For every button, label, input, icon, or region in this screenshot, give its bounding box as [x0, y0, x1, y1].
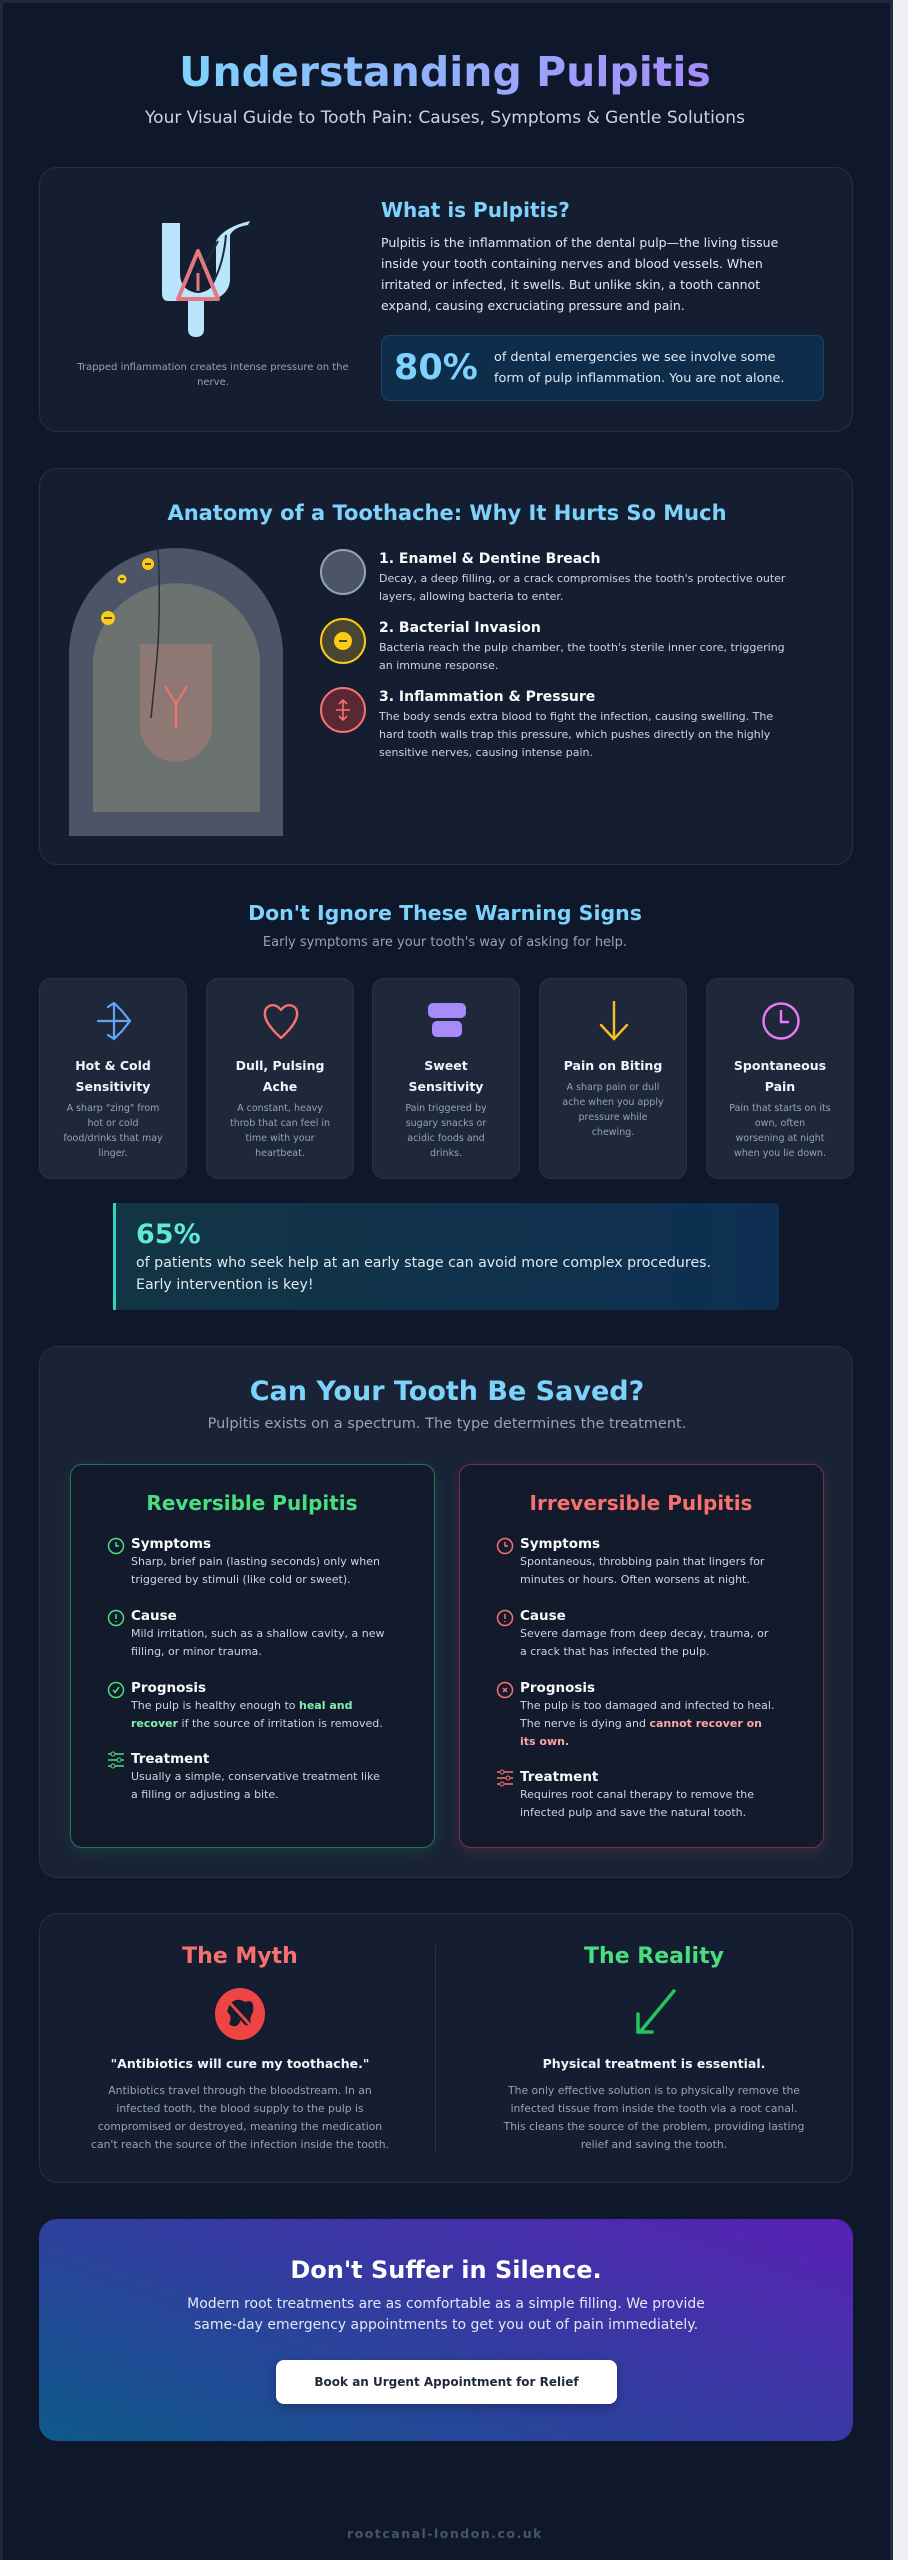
column: reality	[504, 1944, 804, 2151]
paragraph: inside your tooth containing nerves and blood vessels. When	[381, 256, 763, 271]
icon: down arrow	[600, 1001, 628, 1041]
card: spontaneous pain	[706, 978, 854, 1179]
item: prognosis	[496, 1680, 774, 1748]
card: dull pulsing ache: A constant, heavy	[237, 1103, 323, 1114]
card: hot & cold: linger.	[98, 1148, 128, 1159]
item: enamel breach: 1. Enamel & Dentine Breach	[379, 551, 600, 567]
paragraph: Pulpitis is the inflammation of the dental pulp—the living tissue	[381, 235, 778, 250]
panel: what is pulpitis	[39, 167, 853, 432]
card: hot & cold: Sensitivity	[76, 1079, 150, 1094]
item: prognosis: its own.	[520, 1735, 569, 1748]
item: inflammation	[320, 687, 773, 759]
card: spontaneous pain: Pain	[765, 1079, 795, 1094]
item: cause: Mild irritation, such as a shallow cavity, a new	[131, 1627, 385, 1640]
item: treatment: Usually a simple, conservative treatment like	[131, 1770, 380, 1783]
column: reality: relief and saving the tooth.	[581, 2138, 727, 2151]
card: spontaneous pain: own, often	[755, 1118, 805, 1129]
box: reversible	[70, 1464, 435, 1848]
card: pain on biting: Pain on Biting	[564, 1058, 662, 1073]
illustration: tooth cross-section	[69, 548, 283, 836]
paragraph: irritated or infected, it swells. But unlike skin, a tooth cannot	[381, 277, 760, 292]
item: bacterial invasion: an immune response.	[379, 659, 498, 672]
subtitle: Your Visual Guide to Tooth Pain: Causes, Symptoms & Gentle Solutions	[145, 108, 745, 128]
paragraph	[381, 235, 778, 313]
panel: can your tooth be saved	[39, 1346, 853, 1878]
item: treatment: Treatment	[520, 1769, 598, 1785]
card: hot & cold	[39, 978, 187, 1179]
column: myth: "Antibiotics will cure my toothache."	[111, 2056, 369, 2071]
icon: no pill	[215, 1988, 265, 2040]
callout: 65%: of patients who seek help at an early stage can avoid more complex procedures.	[136, 1255, 711, 1271]
column: myth: infected tooth, the blood supply to the pulp is	[116, 2102, 364, 2115]
column: myth: The Myth	[182, 1944, 298, 1969]
card: pain on biting: ache when you apply	[562, 1097, 664, 1108]
column: myth: can't reach the source of the infection inside the tooth.	[91, 2138, 389, 2151]
icon: sweets	[428, 1003, 466, 1037]
card: dull pulsing ache: time with your	[245, 1133, 315, 1144]
panel: call to action: same-day emergency appointments to get you out of pain immediately.	[194, 2317, 698, 2333]
item: cause	[496, 1608, 768, 1658]
icon: arrow	[636, 1989, 676, 2034]
item: inflammation: 3. Inflammation & Pressure	[379, 689, 595, 705]
item: inflammation: The body sends extra blood to fight the infection, causing swelling. The	[379, 710, 773, 723]
item: prognosis: The pulp is healthy enough to heal and	[131, 1699, 352, 1712]
card: hot & cold: Hot & Cold	[75, 1058, 151, 1073]
card: hot & cold: hot or cold	[87, 1118, 139, 1129]
caption: Trapped inflammation creates intense pressure on the nerve.	[77, 362, 349, 388]
card: dull pulsing ache: Ache	[263, 1079, 297, 1094]
card: sweet sensitivity: acidic foods and	[407, 1133, 485, 1144]
item: cause: filling, or minor trauma.	[131, 1645, 262, 1658]
heading: Anatomy of a Toothache: Why It Hurts So Much	[167, 501, 727, 525]
box: irreversible: Irreversible Pulpitis	[530, 1491, 752, 1515]
item: prognosis: recover if the source of irritation is removed.	[131, 1717, 383, 1730]
panel: call to action: Modern root treatments are as comfortable as a simple filling. We provide	[187, 2296, 705, 2312]
card: pain on biting: A sharp pain or dull	[567, 1082, 659, 1093]
column: myth: Antibiotics travel through the bloodstream. In an	[108, 2084, 372, 2097]
subtitle: warning signs: Early symptoms are your tooth's way of asking for help.	[263, 935, 627, 950]
card: sweet sensitivity: sugary snacks or	[406, 1118, 486, 1129]
card: spontaneous pain: when you lie down.	[734, 1148, 826, 1159]
card: pain on biting	[539, 978, 687, 1179]
icon: bacteria	[320, 618, 366, 664]
item: symptoms	[108, 1536, 380, 1586]
item: cause: Cause	[131, 1608, 177, 1624]
subtitle: Pulpitis exists on a spectrum. The type determines the treatment.	[208, 1416, 686, 1432]
panel: anatomy	[39, 468, 853, 865]
heading: What is Pulpitis?	[381, 198, 570, 222]
column: myth: compromised or destroyed, meaning the medication	[98, 2120, 382, 2133]
icon: enamel	[320, 549, 366, 595]
card: hot & cold: A sharp "zing" from	[67, 1103, 159, 1114]
heading: warning signs: Don't Ignore These Warning Signs	[248, 901, 642, 925]
item: treatment: a filling or adjusting a bite.	[131, 1788, 279, 1801]
item: treatment: infected pulp and save the natural tooth.	[520, 1806, 746, 1819]
item: bacterial invasion: 2. Bacterial Invasion	[379, 620, 541, 636]
icon: clock	[762, 1002, 800, 1040]
column: reality: infected tissue from inside the tooth via a root canal.	[511, 2102, 797, 2115]
item: symptoms	[496, 1536, 764, 1586]
card: sweet sensitivity: Pain triggered by	[405, 1103, 487, 1114]
item: cause: Severe damage from deep decay, trauma, or	[520, 1627, 768, 1640]
icon: pressure	[320, 687, 366, 733]
item: enamel breach: Decay, a deep filling, or a crack compromises the tooth's protective outer	[379, 572, 785, 585]
item: symptoms: minutes or hours. Often worsens at night.	[520, 1573, 750, 1586]
item: cause	[108, 1608, 385, 1658]
footer: rootcanal-london.co.uk	[347, 2526, 543, 2541]
card: pain on biting: chewing.	[592, 1127, 634, 1138]
card: sweet sensitivity: drinks.	[430, 1148, 462, 1159]
card: sweet sensitivity: Sensitivity	[409, 1079, 483, 1094]
item: cause: a crack that has infected the pulp.	[520, 1645, 710, 1658]
card: pain on biting: pressure while	[579, 1112, 647, 1123]
item: prognosis: The pulp is too damaged and infected to heal.	[520, 1699, 774, 1712]
panel: call to action	[39, 2219, 853, 2441]
box: irreversible	[459, 1464, 824, 1848]
item: inflammation: sensitive nerves, causing intense pain.	[379, 746, 593, 759]
item: bacterial invasion: Bacteria reach the pulp chamber, the tooth's sterile inner core, triggering	[379, 641, 785, 654]
stat box: 80%: of dental emergencies we see involve some	[494, 350, 775, 365]
column: reality: Physical treatment is essential.	[543, 2056, 765, 2071]
item: prognosis: Prognosis	[520, 1680, 595, 1696]
item: symptoms: triggered by stimuli (like cold or sweet).	[131, 1573, 351, 1586]
card: spontaneous pain: Spontaneous	[734, 1058, 826, 1073]
card: spontaneous pain: Pain that starts on its	[729, 1103, 831, 1114]
stat box: 80%: form of pulp inflammation. You are not alone.	[494, 371, 784, 386]
column: myth	[91, 1944, 389, 2151]
heading: Can Your Tooth Be Saved?	[250, 1376, 644, 1407]
card: spontaneous pain: worsening at night	[735, 1133, 825, 1144]
stat box: 80%	[381, 335, 824, 401]
card: dull pulsing ache	[206, 978, 354, 1179]
panel: myth vs reality	[39, 1913, 853, 2183]
item: bacterial invasion	[320, 618, 785, 672]
icon: hot cold	[96, 1002, 132, 1040]
icon: heart	[264, 1004, 298, 1040]
card: sweet sensitivity: Sweet	[424, 1058, 468, 1073]
box: reversible: Reversible Pulpitis	[146, 1491, 358, 1515]
callout: 65%: 65%	[136, 1219, 201, 1250]
icon: inflamed tooth	[162, 221, 250, 337]
stat box: 80%: 80%	[394, 348, 478, 388]
button	[276, 2360, 617, 2404]
item: prognosis: Prognosis	[131, 1680, 206, 1696]
card: sweet sensitivity	[372, 978, 520, 1179]
item: symptoms: Symptoms	[520, 1536, 600, 1552]
item: enamel breach	[320, 549, 786, 603]
item: symptoms: Sharp, brief pain (lasting seconds) only when	[131, 1555, 380, 1568]
column: reality: The Reality	[584, 1944, 724, 1969]
item: prognosis	[108, 1680, 383, 1730]
card: dull pulsing ache: throb that can feel in	[230, 1118, 330, 1129]
item: cause: Cause	[520, 1608, 566, 1624]
item: treatment: Treatment	[131, 1751, 209, 1767]
card: dull pulsing ache: heartbeat.	[255, 1148, 305, 1159]
item: prognosis: The nerve is dying and cannot recover on	[520, 1717, 762, 1730]
item: symptoms: Symptoms	[131, 1536, 211, 1552]
item: treatment	[497, 1769, 754, 1819]
title: Understanding Pulpitis	[179, 48, 711, 96]
item: treatment	[108, 1751, 380, 1801]
callout: 65%	[113, 1203, 779, 1310]
callout: 65%: Early intervention is key!	[136, 1277, 314, 1293]
item: inflammation: hard tooth walls trap this pressure, which pushes directly on the highly	[379, 728, 770, 741]
column: reality: The only effective solution is to physically remove the	[508, 2084, 800, 2097]
button: Book an Urgent Appointment for Relief	[314, 2375, 579, 2389]
column: reality: This cleans the source of the problem, providing lasting	[504, 2120, 804, 2133]
item: enamel breach: layers, allowing bacteria to enter.	[379, 590, 563, 603]
card: dull pulsing ache: Dull, Pulsing	[236, 1058, 324, 1073]
item: symptoms: Spontaneous, throbbing pain that lingers for	[520, 1555, 764, 1568]
card: hot & cold: food/drinks that may	[63, 1133, 163, 1144]
panel: call to action: Don't Suffer in Silence.	[290, 2256, 602, 2284]
item: treatment: Requires root canal therapy to remove the	[520, 1788, 754, 1801]
paragraph: expand, causing excruciating pressure and pain.	[381, 298, 685, 313]
